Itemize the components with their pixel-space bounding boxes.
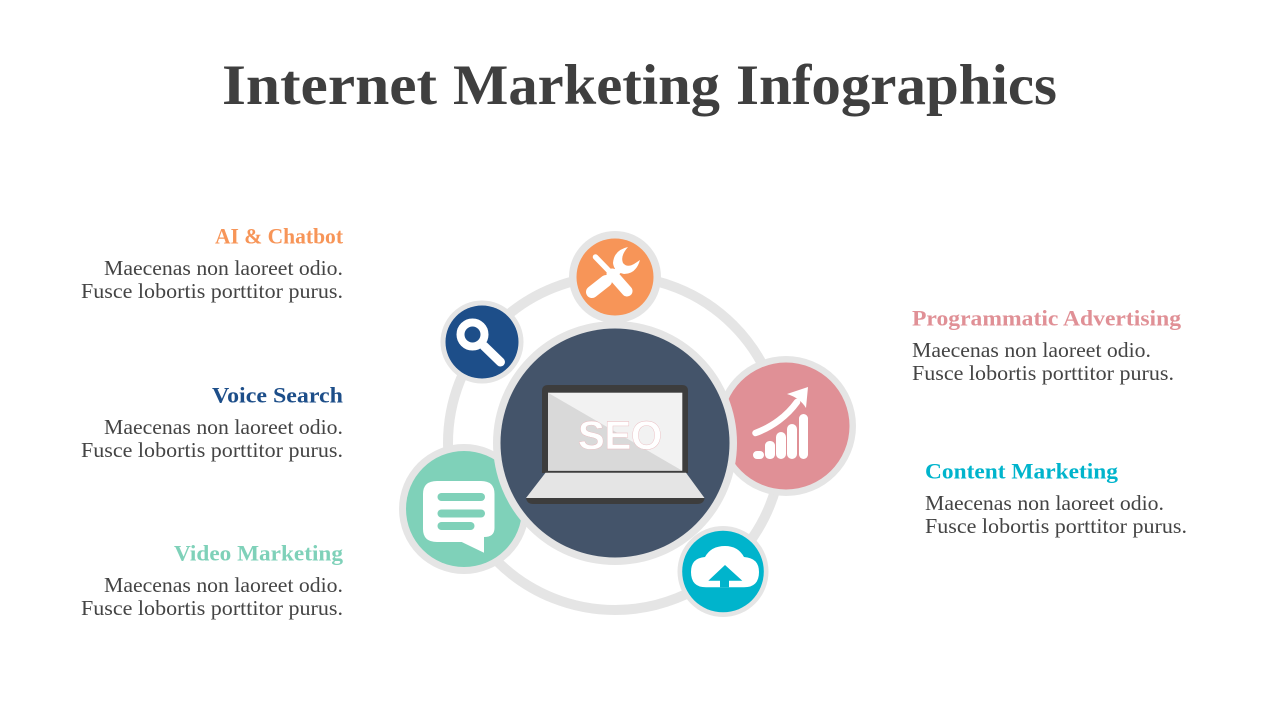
text block: Video Marketing (81, 540, 343, 620)
text block: Voice Search: Fusce lobortis porttitor purus. (81, 438, 343, 462)
text block: Video Marketing: Video Marketing (174, 540, 343, 566)
text block: Content Marketing (925, 458, 1187, 538)
text block: Video Marketing: Fusce lobortis porttitor purus. (81, 596, 343, 620)
text block: Voice Search (81, 382, 343, 462)
text block: Voice Search: Maecenas non laoreet odio. (104, 415, 343, 439)
text block: Programmatic Advertising (912, 306, 1181, 385)
text block: Video Marketing: Maecenas non laoreet odio. (104, 573, 343, 597)
text block: Programmatic Advertising: Fusce lobortis porttitor purus. (912, 361, 1174, 385)
text block: AI & Chatbot: Maecenas non laoreet odio. (104, 256, 343, 280)
title (222, 54, 1057, 117)
SEO label: SEO (578, 414, 662, 458)
title: Marketing (453, 54, 720, 117)
text block: AI & Chatbot (81, 224, 344, 303)
text block: Voice Search: Voice Search (212, 382, 343, 408)
text block: Programmatic Advertising: Programmatic Advertising (912, 306, 1181, 330)
text block: Programmatic Advertising: Maecenas non laoreet odio. (912, 338, 1151, 362)
text block: Content Marketing: Fusce lobortis porttitor purus. (925, 514, 1187, 538)
icon: green chat bubble (399, 444, 529, 574)
icon: pink growth chart (716, 356, 856, 496)
title: Internet (222, 54, 437, 117)
icon: teal cloud upload (678, 526, 768, 617)
laptop screen (548, 393, 682, 471)
central SEO laptop (493, 321, 737, 565)
text block: AI & Chatbot: Fusce lobortis porttitor purus. (81, 279, 343, 303)
icon: orange tools (569, 231, 661, 323)
icon: blue magnifier (440, 300, 524, 384)
orbit ring (448, 276, 782, 610)
laptop base (526, 473, 704, 504)
text block: AI & Chatbot: AI & Chatbot (215, 224, 344, 248)
title: Infographics (736, 54, 1057, 117)
text block: Content Marketing: Content Marketing (925, 458, 1118, 484)
laptop bezel (542, 385, 688, 473)
text block: Content Marketing: Maecenas non laoreet odio. (925, 491, 1164, 515)
